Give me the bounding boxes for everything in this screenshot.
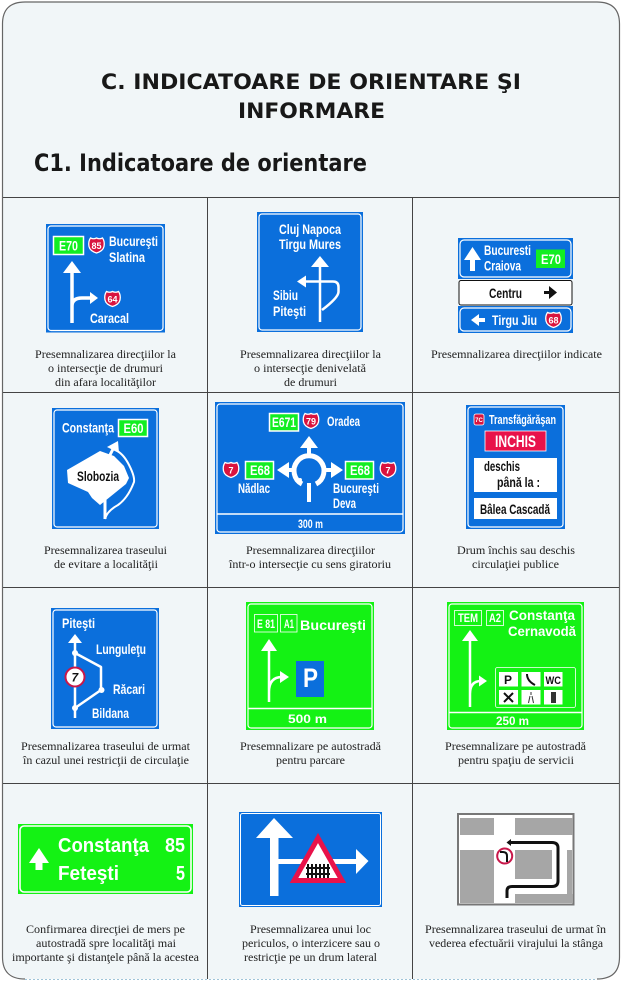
panel: hazard on side road — [239, 812, 382, 964]
caption — [425, 922, 606, 950]
caption: vederea efectuării virajului la stânga — [429, 936, 604, 950]
sign: stacked direction plates: Centru — [489, 285, 522, 301]
sign: stacked direction plates: Bucuresti — [484, 242, 531, 258]
caption: Presemnalizarea direcţiilor la — [35, 347, 177, 361]
sign: stacked direction plates — [458, 238, 573, 333]
sign: Piteşti Lunguleţu Răcari Bildana: Bildana — [92, 705, 129, 721]
caption: importante şi distanţele până la acestea — [12, 950, 200, 964]
sign: Transfăgărăşan closed: Bâlea Cascadă — [480, 501, 550, 517]
caption: din afara localităţilor — [55, 375, 156, 389]
caption: Presemnalizare pe autostradă — [240, 739, 382, 753]
sign: roundabout directions: Oradea — [327, 413, 360, 429]
sign: roundabout directions: 7 — [228, 466, 234, 476]
panel: grade-separated intersection — [240, 212, 382, 389]
caption — [44, 543, 168, 571]
caption — [228, 543, 391, 571]
sign: Cluj Napoca Tirgu Mures: Tirgu Mures — [279, 236, 341, 252]
sign: Bucureşti Slatina Caracal — [46, 224, 165, 332]
caption: Confirmarea direcţiei de mers pe — [26, 922, 185, 936]
panel: intersection outside localities — [35, 224, 177, 389]
sign: Transfăgărăşan closed — [466, 405, 565, 529]
sign: parking on motorway: P — [303, 663, 318, 693]
sign: Constanţa Slobozia: Constanţa — [62, 420, 114, 436]
caption: Presemnalizarea direcţiilor — [246, 543, 375, 557]
panel: roundabout — [215, 402, 405, 571]
sign: stacked direction plates: E70 — [541, 251, 561, 267]
sign: Piteşti Lunguleţu Răcari Bildana — [51, 608, 159, 729]
caption: Presemnalizarea direcţiilor la — [240, 347, 382, 361]
caption — [457, 543, 575, 571]
sign: service area on motorway: Cernavodă — [508, 623, 576, 639]
sign: Constanţa Slobozia — [52, 408, 159, 529]
caption: în cazul unei restricţii de circulaţie — [22, 753, 189, 767]
caption: autostradă spre localităţi mai — [36, 936, 177, 950]
main title — [101, 70, 521, 123]
sign: service area on motorway: 250 m — [496, 714, 529, 728]
sign: Bucureşti Slatina Caracal: 64 — [108, 294, 118, 304]
sign: stacked direction plates: 68 — [548, 316, 558, 326]
sign: service area on motorway: WC — [546, 675, 561, 687]
sign: service area on motorway: Constanţa — [509, 607, 575, 623]
caption: periculos, o interzicere sau o — [242, 936, 380, 950]
sign: roundabout directions: E68 — [350, 462, 370, 478]
section subtitle: C1. Indicatoare de orientare — [34, 149, 367, 177]
panel: indicated directions — [431, 238, 602, 361]
sign: roundabout directions — [215, 402, 405, 534]
sign: stacked direction plates: Craiova — [484, 258, 521, 274]
sign: Transfăgărăşan closed: până la : — [497, 474, 540, 490]
sign: Constanţa 85 Feteşti 5 — [18, 824, 193, 894]
caption: de evitare a localităţii — [54, 557, 159, 571]
sign: Constanţa 85 Feteşti 5: 85 — [165, 835, 185, 857]
sign: parking on motorway: A1 — [284, 617, 294, 631]
caption — [35, 347, 177, 389]
sign: roundabout directions: Bucureşti — [333, 480, 379, 496]
main title: C. INDICATOARE DE ORIENTARE ŞI — [101, 70, 521, 94]
sign: service area on motorway — [447, 602, 584, 730]
sign: Constanţa 85 Feteşti 5: Feteşti — [58, 863, 119, 885]
caption: o intersecţie denivelată — [254, 361, 367, 375]
sign: Constanţa Slobozia: E60 — [124, 420, 144, 436]
sign: parking on motorway — [246, 602, 374, 730]
sign: Bucureşti Slatina Caracal: Slatina — [109, 249, 145, 265]
caption — [445, 739, 587, 767]
sign: roundabout directions: E671 — [272, 414, 296, 430]
panel: left turn route — [425, 814, 606, 950]
table grid — [3, 197, 619, 979]
panel: motorway service area — [445, 602, 587, 767]
sign: roundabout directions: 79 — [306, 416, 316, 426]
sign: stacked direction plates: Tirgu Jiu — [492, 312, 537, 328]
panel: closed road — [457, 405, 575, 571]
sign: Cluj Napoca Tirgu Mures: Sibiu — [273, 287, 298, 303]
sign: Cluj Napoca Tirgu Mures: Cluj Napoca — [279, 221, 341, 237]
sign: Transfăgărăşan closed: deschis — [484, 458, 520, 474]
caption: de drumuri — [284, 375, 338, 389]
caption: Presemnalizarea direcţiilor indicate — [431, 347, 602, 361]
sign: parking on motorway: Bucureşti — [300, 617, 366, 633]
sign: parking on motorway: E 81 — [257, 617, 275, 631]
panel: route with traffic restriction — [21, 608, 191, 767]
caption — [240, 347, 382, 389]
sign: Constanţa Slobozia: Slobozia — [77, 468, 119, 484]
sign: service area on motorway: P — [504, 673, 512, 687]
caption — [12, 922, 200, 964]
panel: locality bypass — [44, 408, 168, 571]
sign: Bucureşti Slatina Caracal: E70 — [59, 238, 78, 254]
sign: Transfăgărăşan closed: 7C — [475, 418, 484, 424]
sign: Piteşti Lunguleţu Răcari Bildana: Lunguleţu — [96, 641, 146, 657]
sign: Piteşti Lunguleţu Răcari Bildana: Răcari — [113, 681, 145, 697]
sign: roundabout directions: Deva — [333, 495, 356, 511]
sign: Bucureşti Slatina Caracal: Bucureşti — [109, 233, 158, 249]
caption: o intersecţie de drumuri — [48, 361, 164, 375]
sign: Piteşti Lunguleţu Răcari Bildana: Piteşti — [62, 615, 95, 631]
caption — [21, 739, 191, 767]
sign: service area on motorway: TEM — [458, 611, 478, 625]
heading block — [34, 70, 521, 177]
caption: Presemnalizarea traseului — [44, 543, 168, 557]
sign: Constanţa 85 Feteşti 5: 5 — [176, 863, 185, 885]
sign: service area on motorway: A2 — [489, 611, 501, 625]
sign: Piteşti Lunguleţu Răcari Bildana: 7 — [72, 670, 80, 684]
caption: Presemnalizarea traseului de urmat în — [425, 922, 606, 936]
caption: Presemnalizare pe autostradă — [445, 739, 587, 753]
sign: Constanţa 85 Feteşti 5: Constanţa — [58, 835, 150, 857]
sign: roundabout directions: Nădlac — [238, 480, 270, 496]
caption: circulaţiei publice — [472, 557, 559, 571]
sign: Bucureşti Slatina Caracal: 85 — [92, 241, 102, 251]
caption: Presemnalizarea traseului de urmat — [21, 739, 191, 753]
caption: într-o intersecţie cu sens giratoriu — [228, 557, 391, 571]
caption — [240, 739, 382, 767]
panel: motorway distance confirmation — [12, 824, 200, 964]
panel: motorway parking — [240, 602, 382, 767]
sign: roundabout directions: E68 — [250, 462, 270, 478]
sign: Transfăgărăşan closed: Transfăgărăşan — [489, 413, 556, 427]
caption: pentru spaţiu de servicii — [458, 753, 575, 767]
sign: level crossing warning — [239, 812, 382, 907]
caption: pentru parcare — [276, 753, 345, 767]
caption: Drum închis sau deschis — [457, 543, 575, 557]
sign: Cluj Napoca Tirgu Mures — [257, 212, 363, 332]
main title: INFORMARE — [238, 99, 385, 123]
sign: parking on motorway: 500 m — [288, 714, 327, 726]
sign: route map for left turn — [458, 814, 574, 904]
caption: restricţie pe un drum lateral — [244, 950, 378, 964]
sign: Bucureşti Slatina Caracal: Caracal — [90, 310, 129, 326]
caption: Presemnalizarea unui loc — [250, 922, 371, 936]
sign: Transfăgărăşan closed: INCHIS — [495, 432, 536, 451]
sign: roundabout directions: 7 — [385, 466, 391, 476]
sign: Cluj Napoca Tirgu Mures: Piteşti — [273, 303, 306, 319]
sign: roundabout directions: 300 m — [298, 517, 323, 531]
caption — [242, 922, 380, 964]
